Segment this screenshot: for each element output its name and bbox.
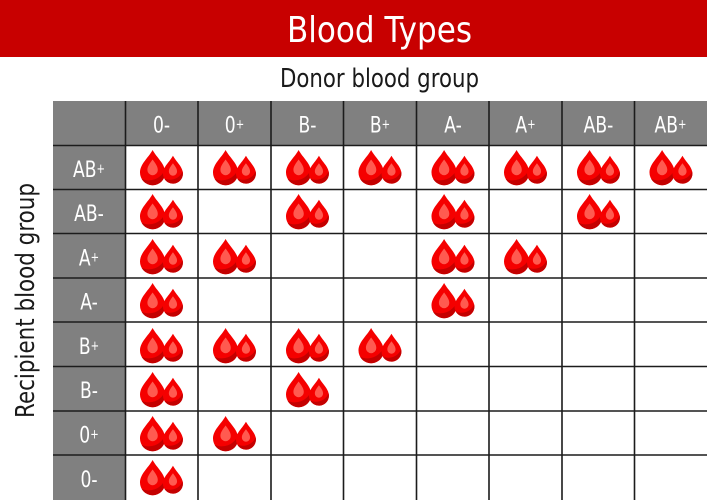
- row 0- compatible donors: [140, 460, 183, 495]
- recipient row headers: +: [90, 426, 99, 442]
- row A+ compatible donors: [140, 239, 547, 274]
- title banner: Blood Types: [287, 10, 472, 51]
- recipient row headers: AB: [73, 157, 97, 183]
- donor column headers: +: [382, 116, 390, 132]
- row A- compatible donors: [140, 283, 474, 318]
- recipient row headers: 0-: [80, 467, 98, 493]
- recipient row headers: 0: [79, 422, 90, 448]
- donor column headers: [153, 112, 687, 138]
- donor column headers: +: [678, 116, 687, 132]
- recipient row headers: A-: [80, 289, 98, 315]
- recipient row headers: B: [79, 334, 91, 360]
- recipient row headers: AB-: [74, 201, 104, 227]
- donor column headers: B-: [299, 112, 316, 138]
- donor column headers: B: [370, 112, 382, 138]
- donor column headers: +: [236, 116, 244, 132]
- recipient row headers: B-: [80, 378, 98, 404]
- donor column headers: A: [515, 112, 527, 138]
- row B- compatible donors: [140, 372, 329, 407]
- donor column headers: 0-: [153, 112, 170, 138]
- row AB+ compatible donors: [140, 150, 692, 185]
- recipient row headers: +: [97, 161, 105, 176]
- recipient row headers: [73, 157, 105, 493]
- table grid: [53, 101, 707, 500]
- donor column headers: 0: [225, 112, 236, 138]
- recipient axis heading: Recipient blood group: [11, 183, 41, 418]
- recipient row headers: +: [91, 338, 99, 353]
- row B+ compatible donors: [140, 328, 401, 363]
- row 0+ compatible donors: [140, 416, 256, 451]
- title banner: [0, 0, 707, 57]
- donor column headers: AB-: [584, 112, 613, 138]
- recipient row headers: +: [91, 249, 99, 265]
- recipient row headers: A: [79, 245, 91, 271]
- donor axis heading: Donor blood group: [280, 64, 479, 94]
- donor column headers: AB: [654, 112, 678, 138]
- donor column headers: +: [527, 116, 536, 132]
- donor column headers: A-: [444, 112, 462, 138]
- row AB- compatible donors: [140, 194, 620, 229]
